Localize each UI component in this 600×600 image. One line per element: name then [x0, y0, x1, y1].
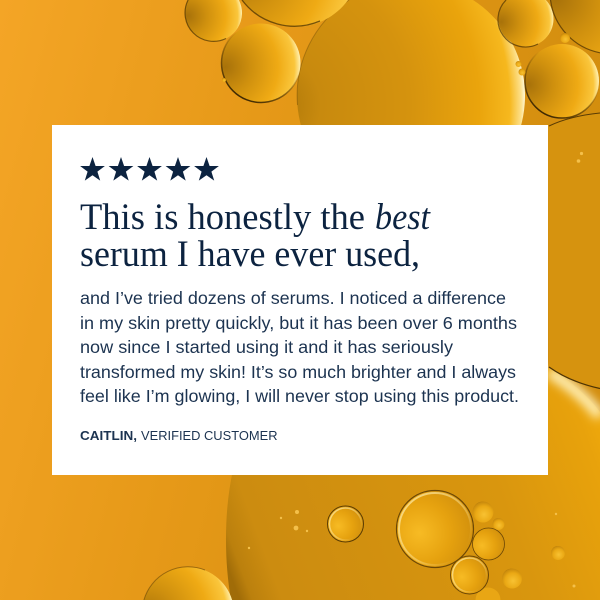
bubble: top medium left: [222, 24, 300, 102]
bubble: large bottom: [226, 340, 600, 600]
bubble: large right: [548, 113, 600, 388]
bubble: top overlap: [242, 0, 348, 27]
bubble: right medium: [525, 44, 599, 118]
bubble: bottom cluster: [396, 490, 522, 600]
customer attribution: VERIFIED CUSTOMER: [141, 428, 278, 443]
star rating: [80, 157, 219, 181]
headline: best: [375, 197, 432, 238]
headline: serum I have ever used,: [80, 234, 420, 275]
bubble: top small left: [185, 0, 242, 41]
bubble: bottom left: [144, 567, 232, 600]
bubble: top right corner: [550, 0, 600, 53]
customer attribution: CAITLIN,: [80, 428, 137, 443]
bubble: large top centre: [297, 0, 525, 210]
review card: [52, 125, 548, 475]
review body text: now since I started using it and it has seriously: [80, 337, 453, 357]
tiny droplets: bottom: [248, 510, 576, 588]
review body text: in my skin pretty quickly, but it has been over 6 months: [80, 313, 517, 333]
headline: This is honestly the: [80, 197, 365, 238]
bubble: top right small: [498, 0, 554, 47]
bubble: bottom lone droplet: [328, 506, 364, 542]
headline: [80, 197, 432, 275]
review body text: transformed my skin! It’s so much brighter and I always: [80, 362, 516, 382]
review body text: [80, 288, 519, 406]
tiny bubbles: top right: [222, 33, 570, 82]
customer attribution: [80, 428, 278, 443]
review body text: and I’ve tried dozens of serums. I noticed a difference: [80, 288, 506, 308]
review body text: feel like I’m glowing, I will never stop using this product.: [80, 386, 519, 406]
